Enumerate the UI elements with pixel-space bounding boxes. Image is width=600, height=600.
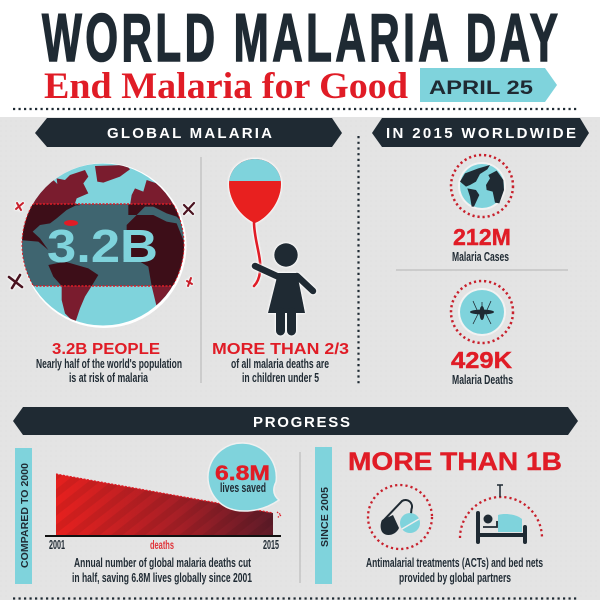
text: treatments and bed nets: provided by global partners (399, 570, 511, 585)
callout: 6.8M lives saved: 6.8M (215, 462, 270, 485)
subtitle: End Malaria for Good (44, 66, 408, 107)
label: malaria cases: Malaria Cases (452, 249, 509, 264)
icon: balloon (229, 159, 281, 286)
chart axis labels: 2015 (263, 537, 279, 552)
icon: pills in dotted ring (368, 485, 432, 549)
section header: progress (13, 407, 578, 435)
heading: 3.2B people: 3.2B PEOPLE (52, 341, 160, 358)
section header: global malaria: GLOBAL MALARIA (107, 125, 272, 142)
title: WORLD MALARIA DAY (42, 0, 558, 75)
heading: more than 1B: MORE THAN 1B (348, 448, 562, 476)
text: deaths cut in half (72, 555, 252, 585)
date banner: APRIL 25 (429, 78, 534, 99)
section header: global malaria (35, 118, 342, 147)
text: half of the population at risk: is at risk of malaria (69, 370, 149, 385)
callout: 6.8M lives saved (208, 443, 279, 511)
icon: mosquito markers around the globe (9, 203, 194, 288)
text: deaths cut in half: in half, saving 6.8M lives globally since 2001 (72, 570, 252, 585)
side label: compared to 2000: COMPARED TO 2000 (19, 463, 31, 568)
globe with at-risk band (15, 163, 191, 328)
globe with at-risk band: 3.2B (47, 220, 158, 272)
text: half of the population at risk (36, 356, 182, 385)
side label: since 2005 (315, 447, 332, 584)
icon: earth in dotted ring (451, 155, 513, 217)
text: children under 5: of all malaria deaths are (231, 356, 329, 371)
section header: in 2015 worldwide (372, 118, 589, 147)
label: malaria deaths: Malaria Deaths (452, 372, 513, 387)
stat: 429K: 429K (451, 347, 512, 373)
stat: 212M: 212M (453, 224, 511, 250)
date banner (420, 68, 557, 102)
text: children under 5: in children under 5 (242, 370, 319, 385)
chart axis labels: deaths (150, 538, 174, 552)
text: deaths cut in half: Annual number of global malaria deaths cut (74, 555, 251, 570)
section header: in 2015 worldwide: IN 2015 WORLDWIDE (386, 125, 576, 142)
text: children under 5 (231, 356, 329, 385)
callout: 6.8M lives saved: lives saved (220, 480, 266, 495)
area chart: malaria deaths (45, 474, 281, 537)
chart axis labels (49, 537, 279, 552)
section header: progress: PROGRESS (253, 414, 350, 431)
text: treatments and bed nets (366, 555, 543, 585)
heading: more than 2/3: MORE THAN 2/3 (212, 341, 349, 358)
text: half of the population at risk: Nearly half of the world's population (36, 356, 182, 371)
icon: child (255, 243, 313, 331)
icon: bed with net (460, 485, 542, 542)
side label: compared to 2000 (15, 448, 32, 584)
chart axis labels: 2001 (49, 537, 65, 552)
side label: since 2005: SINCE 2005 (319, 487, 331, 547)
icon: mosquito in dotted ring (451, 281, 513, 343)
